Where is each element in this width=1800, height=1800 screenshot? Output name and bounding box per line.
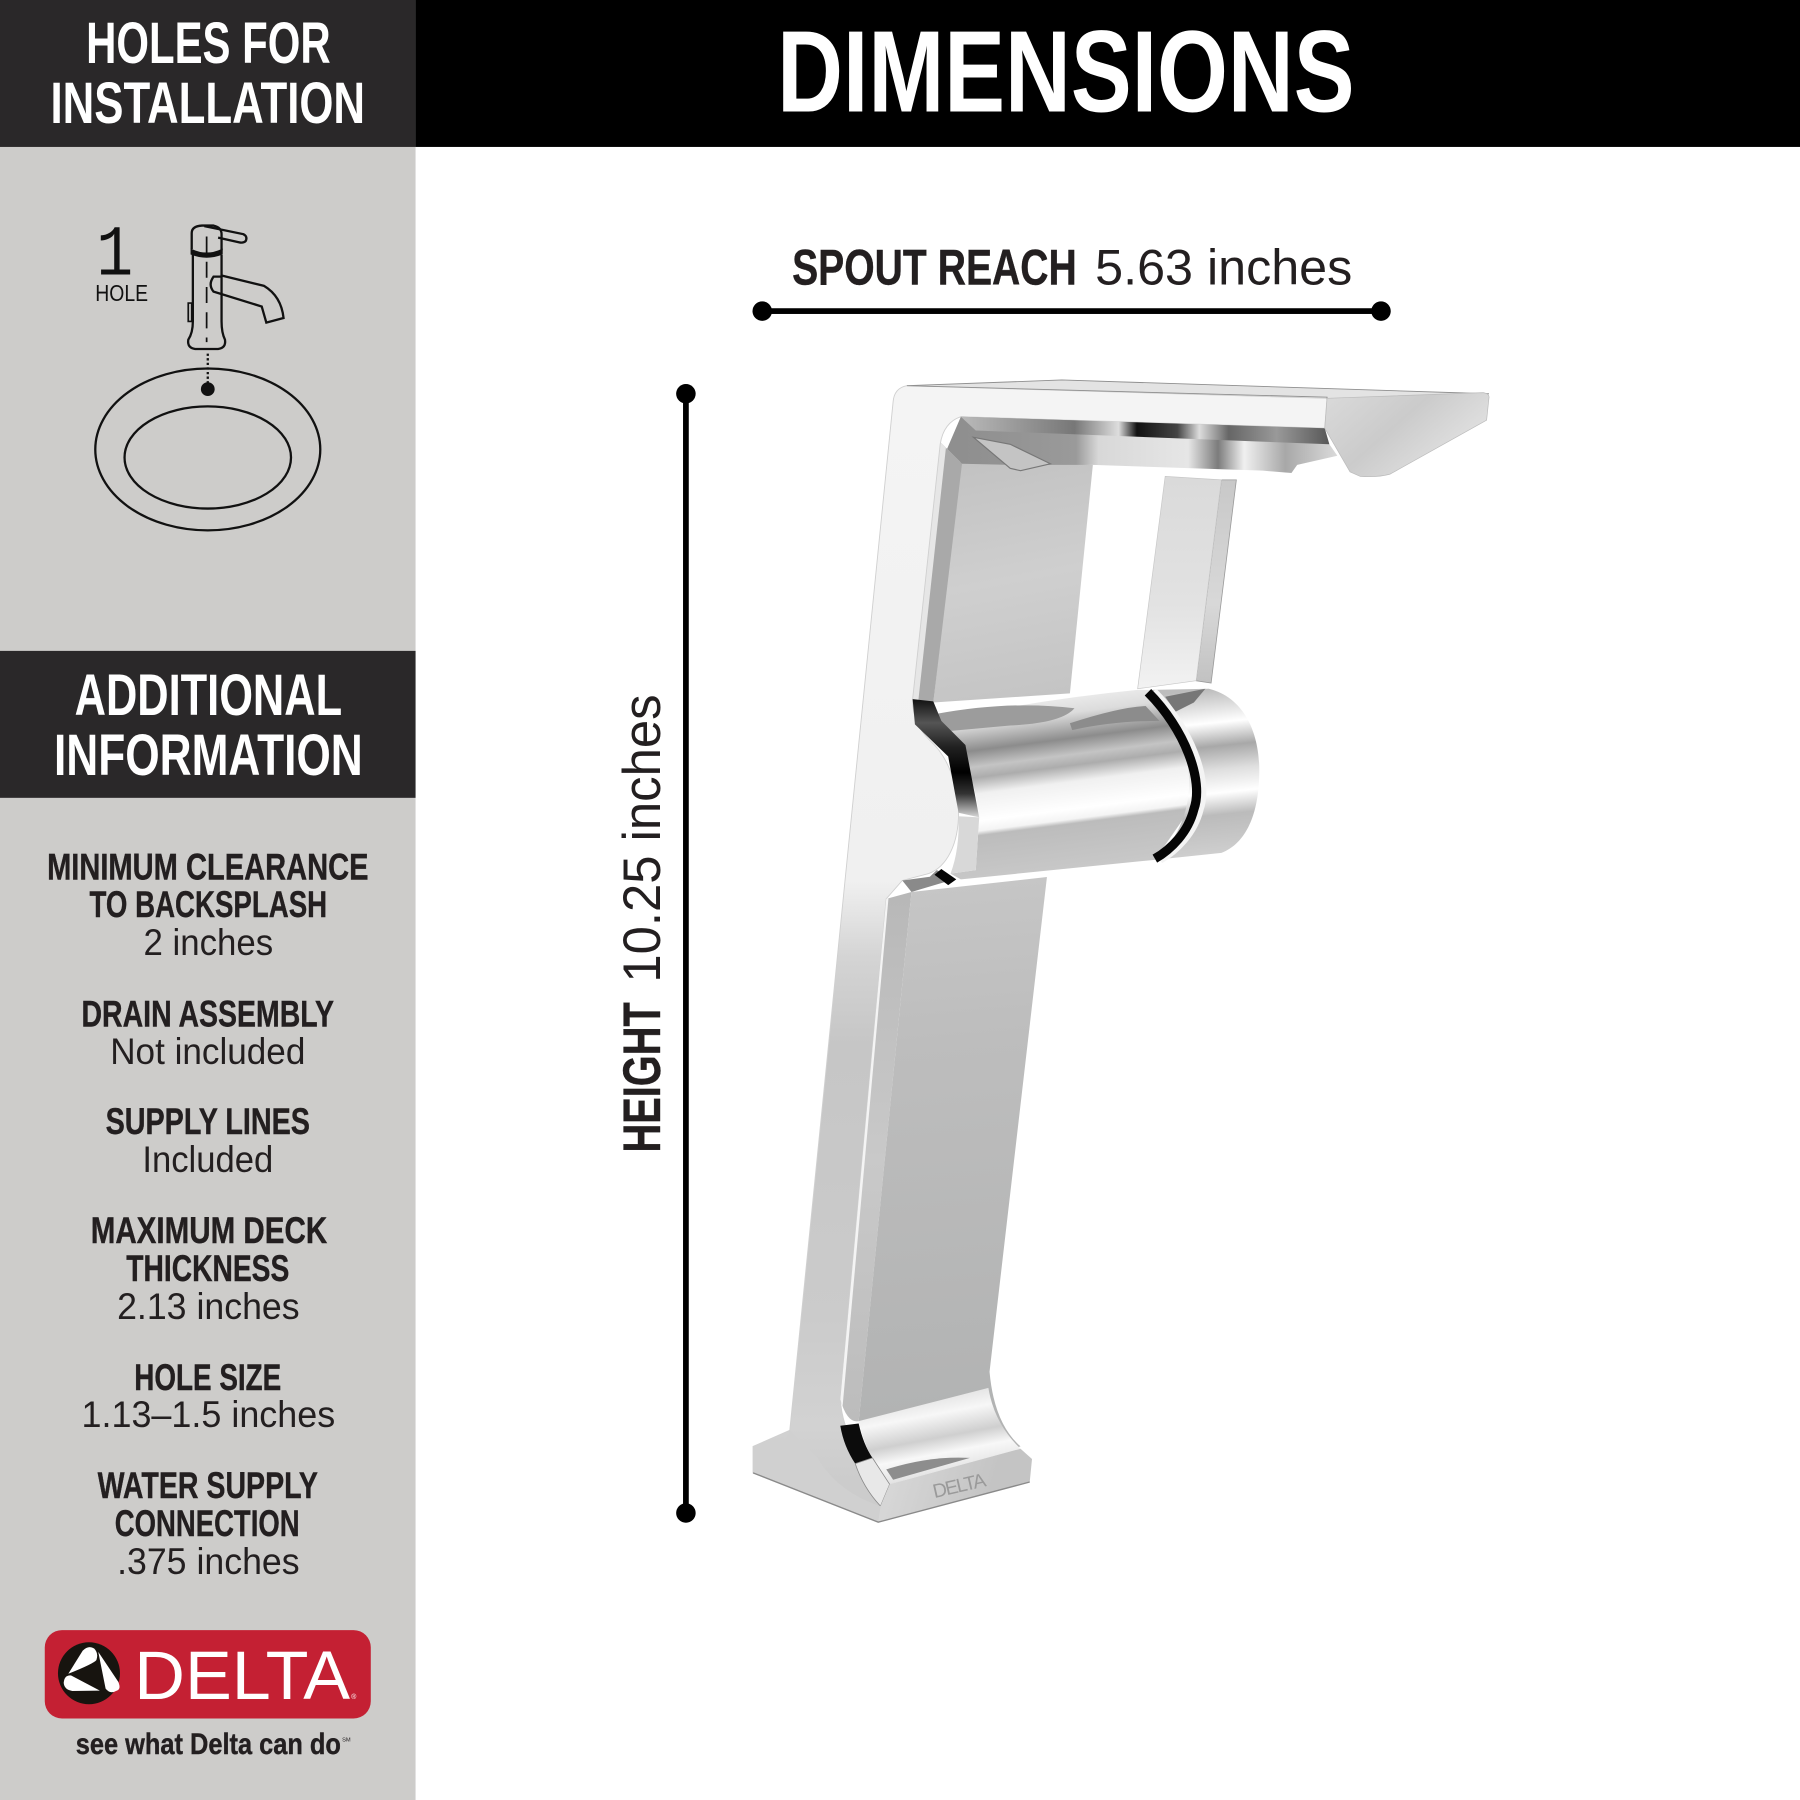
header: dimensions banner: [416, 0, 1800, 147]
text block: drain assembly: [82, 993, 334, 1072]
text block: hole size: [82, 1357, 335, 1435]
panel: left sidebar background: [0, 0, 416, 1800]
logo: Delta brand: [45, 1630, 371, 1761]
text block: hole size: 1.13–1.5 inches: [82, 1394, 335, 1435]
tagline: see what Delta can do: [76, 1728, 341, 1761]
heading: holes for installation: INSTALLATION: [51, 71, 365, 136]
faucet: black ring groove: [1148, 692, 1197, 859]
text block: water supply connection: WATER SUPPLY: [98, 1465, 318, 1506]
dimension: height: [613, 384, 696, 1523]
dimension: spout reach: 5.63 inches: [1095, 239, 1352, 296]
heading: additional information: INFORMATION: [54, 723, 363, 788]
dimension: spout reach: SPOUT REACH: [792, 239, 1077, 296]
text block: minimum clearance: MINIMUM CLEARANCE: [47, 846, 368, 887]
text block: water supply connection: CONNECTION: [115, 1503, 300, 1544]
text block: maximum deck thickness: 2.13 inches: [117, 1286, 300, 1327]
text block: drain assembly: DRAIN ASSEMBLY: [82, 993, 334, 1034]
arrow: vertical measure line: [676, 384, 696, 1523]
label: 1 hole: HOLE: [95, 280, 148, 306]
label: 1 hole: 1: [96, 216, 133, 296]
text block: minimum clearance: 2 inches: [143, 922, 273, 963]
text block: supply lines: [106, 1101, 310, 1180]
faucet: spout end wedge: [1325, 393, 1489, 477]
heading: additional information: [0, 651, 416, 798]
faucet: lower joint glint: [902, 870, 955, 892]
faucet: seam glint: [913, 699, 979, 817]
heading: holes for installation: HOLES FOR: [86, 11, 331, 76]
icon: one hole faucet and sink diagram: [95, 216, 320, 530]
faucet: upper rear panel: [913, 442, 1093, 703]
faucet: spout top surface: [907, 380, 1489, 399]
arrow: horizontal measure line: [752, 301, 1391, 321]
icon: sink basin: [95, 368, 320, 530]
faucet: lever handle: [1138, 476, 1236, 689]
logo: Delta brand: SM: [342, 1737, 351, 1743]
dimension: height: 10.25 inches: [613, 695, 672, 983]
text block: water supply connection: [98, 1465, 318, 1582]
faucet: ring highlight: [1153, 692, 1201, 859]
text block: drain assembly: Not included: [110, 1031, 305, 1072]
faucet: foot flare: [840, 1388, 1021, 1506]
icon: faucet outline: [188, 226, 284, 349]
logo: Delta brand: DELTA: [134, 1637, 350, 1714]
heading: additional information: ADDITIONAL: [75, 663, 342, 728]
text: embossed brand on base: DELTA: [931, 1469, 988, 1503]
text block: minimum clearance: TO BACKSPLASH: [90, 884, 327, 925]
text block: maximum deck thickness: THICKNESS: [126, 1248, 289, 1289]
faucet: spout underside: [947, 417, 1337, 473]
text block: hole size: HOLE SIZE: [134, 1357, 281, 1398]
faucet: cylinder top reflections: [936, 705, 1074, 731]
icon: mounting hole: [201, 382, 215, 396]
icon: dotted drop line: [207, 354, 209, 385]
icon: Delta triangle mark: [58, 1642, 120, 1704]
text block: maximum deck thickness: [91, 1210, 328, 1327]
dimension: spout reach: [752, 239, 1391, 321]
text block: maximum deck thickness: MAXIMUM DECK: [91, 1210, 328, 1251]
faucet: lower rear panel: [840, 877, 1047, 1484]
faucet: handle cylinder: [902, 689, 1259, 892]
heading: holes for installation: [0, 0, 416, 147]
text block: supply lines: SUPPLY LINES: [106, 1101, 310, 1142]
text block: supply lines: Included: [142, 1139, 273, 1180]
logo: Delta brand: ®: [351, 1693, 356, 1701]
text block: water supply connection: .375 inches: [117, 1541, 300, 1582]
faucet: base plate: [753, 1430, 1032, 1522]
dimension: height: HEIGHT: [613, 1002, 672, 1153]
illustration: chrome faucet: [753, 380, 1489, 1522]
faucet: column and spout body: [753, 386, 1327, 1522]
title: DIMENSIONS: [777, 6, 1355, 136]
text block: minimum clearance: [47, 846, 368, 963]
